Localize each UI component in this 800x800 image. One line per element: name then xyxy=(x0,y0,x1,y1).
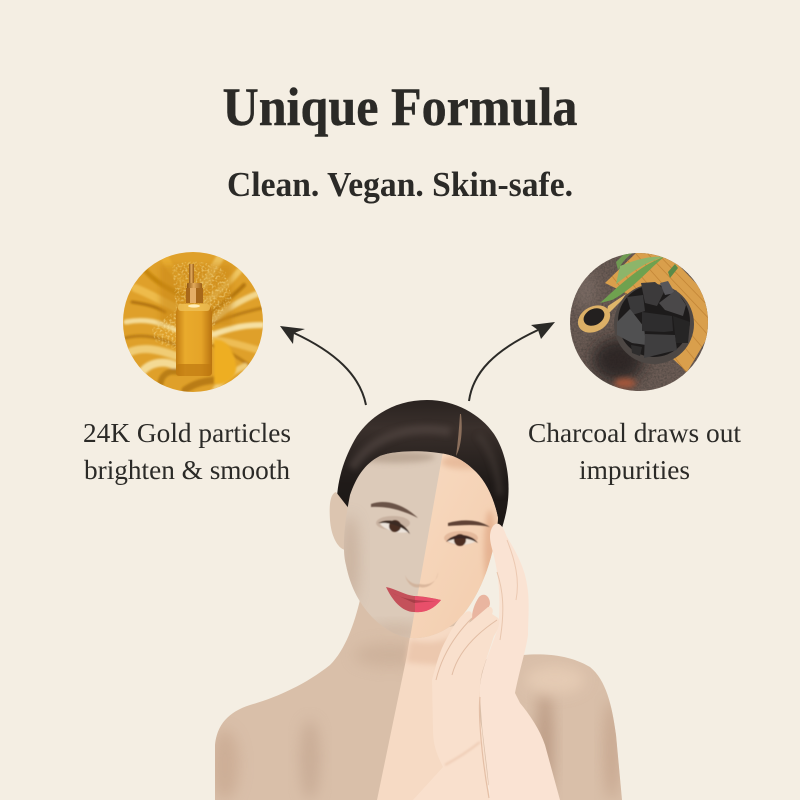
right label: Charcoal draws out xyxy=(528,418,742,448)
charcoal chunks xyxy=(617,281,690,358)
arrow: to gold xyxy=(280,326,366,405)
bottle xyxy=(176,264,212,376)
finger behind jaw xyxy=(472,595,490,622)
icon: gold serum circle xyxy=(120,250,266,395)
left eyebrow xyxy=(371,502,418,518)
hair xyxy=(337,400,509,540)
left eye xyxy=(376,516,410,534)
left label xyxy=(83,418,291,485)
right label: impurities xyxy=(579,455,690,485)
title: Unique Formula xyxy=(222,77,578,137)
spoon xyxy=(608,294,626,312)
right eyebrow xyxy=(448,520,490,527)
icon: charcoal bowl circle xyxy=(570,253,708,391)
lips xyxy=(386,587,441,612)
ear xyxy=(330,492,350,550)
shoulders and neck xyxy=(211,600,622,800)
left label: 24K Gold particles xyxy=(83,418,291,448)
hand: lower, in front xyxy=(413,607,499,800)
bamboo mat xyxy=(605,252,712,372)
infographic canvas xyxy=(84,87,741,800)
bowl xyxy=(614,284,694,364)
right label xyxy=(528,418,742,485)
right eye xyxy=(444,531,478,546)
hand: upper, against temple xyxy=(480,524,560,800)
subtitle: Clean. Vegan. Skin-safe. xyxy=(227,165,573,204)
portrait: woman half-toned xyxy=(211,400,622,800)
left label: brighten & smooth xyxy=(84,455,290,485)
nose xyxy=(405,572,438,587)
leaves xyxy=(600,257,664,303)
towel xyxy=(472,785,490,800)
lighter half of neck and chest xyxy=(377,620,480,800)
arrow: to charcoal xyxy=(469,322,555,401)
face xyxy=(344,451,498,638)
